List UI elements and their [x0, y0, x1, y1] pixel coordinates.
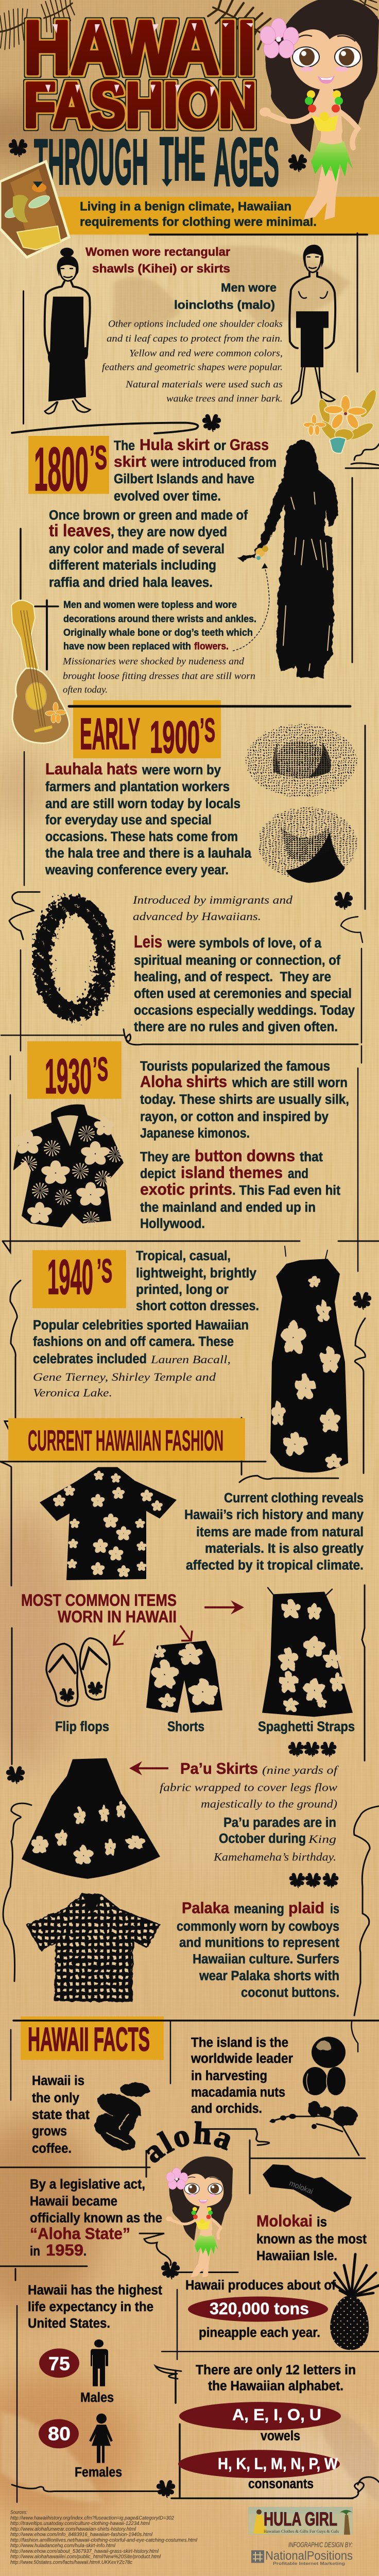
- molokai fact: [256, 2212, 367, 2263]
- stat: males: [39, 2340, 114, 2405]
- celebrities text: celebrates included: [33, 1352, 147, 1366]
- palaka text: is: [330, 1902, 339, 1916]
- aloha shirts text: [140, 1059, 349, 1141]
- macadamia fact: [191, 2036, 293, 2116]
- current hawaiian fashion heading: [8, 1418, 245, 1461]
- title clovers: [9, 139, 307, 172]
- arrow to pau skirt: [129, 1761, 168, 1775]
- palaka text: commonly worn by cowboys: [177, 1920, 339, 1934]
- current clothing text: Current clothing reveals: [224, 1491, 364, 1505]
- decorations text: Originally whale bone or dog’s teeth which: [63, 627, 253, 638]
- current clothing text: Hawaii’s rich history and many: [184, 1508, 364, 1522]
- coffee fact: Hawaii is: [32, 2074, 84, 2088]
- 1800s intro text: Grass: [230, 436, 269, 453]
- most common items heading: WORN IN HAWAII: [58, 1607, 177, 1626]
- pau parades text: October during: [219, 1832, 306, 1846]
- pre-contact script text: Other options included one shoulder cloaks: [108, 319, 283, 329]
- aloha shirts text: Aloha shirts: [140, 1073, 227, 1091]
- men heading: [174, 281, 277, 312]
- button downs text: and: [288, 1167, 308, 1181]
- credit: national positions: [251, 2540, 353, 2566]
- hawaii facts heading: [13, 2016, 164, 2060]
- celebrities text: Lauren Bacall,: [150, 1353, 231, 1366]
- credit: national positions: NationalPositions: [265, 2549, 353, 2563]
- coffee fact: [32, 2074, 90, 2156]
- 1940s heading: [32, 1249, 126, 1308]
- aloha state fact: [30, 2177, 162, 2259]
- current clothing text: affected by it tropical climate.: [186, 1558, 364, 1572]
- most common items heading: MOST COMMON ITEMS: [21, 1590, 177, 1609]
- palaka text: [177, 1900, 339, 2000]
- stat: females: 80: [48, 2423, 71, 2444]
- aloha state fact: 1959: [46, 2241, 83, 2259]
- men heading: Men wore: [221, 281, 277, 295]
- 1940s text: printed, long or: [136, 1283, 229, 1297]
- small arrows in heading: [33, 179, 173, 188]
- button downs text: the mainland and ended up in: [140, 1200, 316, 1215]
- pre-contact script text: feathers and geometric shapes were popular.: [102, 362, 283, 373]
- pau parades text: Kamehameha’s birthday.: [213, 1851, 336, 1863]
- lauhala text: and are still worn today by locals: [45, 797, 240, 811]
- sources: http://traveltips.usatoday.com/culture-clothing-hawaii-12234.html: [10, 2521, 150, 2527]
- title letter highlights: [45, 23, 253, 97]
- pau parades text: King: [308, 1833, 336, 1845]
- lauhala text: occasions. These hats come from: [45, 830, 238, 844]
- molokai fact: is: [317, 2215, 327, 2229]
- decorations text: decorations around there wrists and ankles.: [63, 614, 256, 624]
- hawaiian alphabet fact: the Hawaiian alphabet.: [208, 2379, 343, 2394]
- most common items heading: [21, 1590, 177, 1626]
- missionaries script text: Missionaries were shocked by nudeness and: [62, 656, 245, 667]
- icon: man in malo: [289, 245, 335, 403]
- palaka text: Palaka: [182, 1900, 230, 1917]
- aloha word: [147, 2121, 230, 2163]
- leis text: Leis: [134, 933, 162, 952]
- leis text: spiritual meaning or connection, of: [134, 954, 340, 968]
- icon: orchid branch: [270, 2101, 359, 2155]
- decorations text: [63, 599, 256, 652]
- pau skirts text: (nine yards of: [262, 1764, 339, 1776]
- logo: hula girl: Hawaiian Clothes & Gifts For Guys & Gals: [264, 2529, 339, 2534]
- 1800s intro text: Hula skirt: [140, 436, 210, 453]
- pineapple fact: [185, 2278, 336, 2340]
- sources: http://www.alohahawaiilei.com/public_html/New%20Site/product.html: [10, 2554, 161, 2560]
- title: THE: [160, 125, 205, 193]
- hawaii facts heading: HAWAII FACTS: [28, 2021, 150, 2058]
- aloha shirts text: rayon, or cotton and inspired by: [140, 1110, 329, 1124]
- clover divider icons: [6, 414, 371, 2498]
- clover row one: [288, 1742, 336, 1757]
- aloha shirts text: which are still worn: [232, 1076, 348, 1090]
- decorations text: Men and women were topless and wore: [63, 599, 237, 611]
- hula dancer silhouette: [237, 440, 338, 677]
- clover row two: [289, 1873, 338, 1888]
- aloha shirts text: Tourists popularized the famous: [140, 1059, 330, 1074]
- ti leaves text: raffia and dried hala leaves.: [49, 575, 213, 590]
- icon: woman in kihei: [45, 248, 90, 414]
- pau parades text: [213, 1816, 336, 1863]
- hawaiian alphabet fact: H, K, L, M, N, P, W: [218, 2454, 338, 2472]
- sources: http://www.hawaiihistory.org/index.cfm?fuseaction=ig.page&CategoryID=302: [10, 2515, 174, 2521]
- palaka text: coconut buttons.: [241, 1986, 339, 2000]
- celebrities text: Gene Tierney, Shirley Temple and: [33, 1370, 216, 1383]
- title: [24, 6, 279, 200]
- icon: modern aloha shirt: [40, 1467, 177, 1580]
- 1940s text: [136, 1249, 259, 1313]
- 1940s text: lightweight, brightly: [136, 1266, 257, 1280]
- women heading: shawls (Kihei) or skirts: [92, 262, 230, 276]
- 1800s intro text: skirt: [114, 453, 146, 470]
- hawaiian alphabet fact: A, E, I, O, U: [232, 2405, 321, 2424]
- button downs text: depict: [140, 1167, 176, 1181]
- icon: pineapple: [330, 2254, 379, 2350]
- aloha shirts text: today. These shirts are usually silk,: [140, 1093, 349, 1107]
- icon: 1940s dress: [270, 1246, 348, 1472]
- palaka text: wear Palaka shorts with: [199, 1969, 339, 1983]
- arrow to shorts: [180, 1625, 192, 1640]
- hawaiian alphabet fact: consonants: [248, 2477, 314, 2492]
- aloha state fact: in: [30, 2244, 40, 2259]
- aloha state fact: .: [83, 2244, 87, 2259]
- icon: shorts: [146, 1640, 222, 1713]
- life expectancy fact: United States.: [28, 2316, 110, 2331]
- icon: pau skirt: [22, 1758, 160, 1879]
- flower cluster top right: [303, 388, 379, 453]
- sources: http://www.alohafunwear.com/hawaiian-shirts-history.html: [10, 2527, 136, 2532]
- immigrants script text: advanced by Hawaiians.: [133, 910, 261, 923]
- 1800s intro text: [114, 436, 277, 503]
- immigrants script text: [132, 893, 293, 923]
- hawaiian alphabet fact: vowels: [261, 2429, 300, 2444]
- 1800s intro text: or: [214, 439, 226, 453]
- life expectancy fact: life expectancy in the: [28, 2300, 153, 2314]
- leis text: healing, and of respect. They are: [134, 970, 331, 985]
- arrow to dress: [204, 1600, 244, 1615]
- molokai fact: Hawaiian Isle.: [256, 2249, 337, 2263]
- pineapple fact: 320,000 tons: [210, 2299, 309, 2318]
- celebrities text: [33, 1318, 249, 1399]
- button downs text: exotic prints: [140, 1180, 232, 1198]
- pau skirts text: fabric wrapped to cover legs flow: [160, 1781, 337, 1793]
- stat: males: Males: [80, 2391, 114, 2405]
- icon: spaghetti strap dress: [262, 1588, 353, 1717]
- women heading: [85, 245, 230, 276]
- button downs text: Hollywood.: [140, 1217, 205, 1231]
- lauhala text: were worn by: [142, 763, 221, 777]
- coffee fact: state that: [32, 2108, 90, 2122]
- credit: national positions: Profitable Internet Marketing: [273, 2562, 345, 2566]
- decorations text: flowers.: [194, 640, 229, 652]
- macadamia fact: and orchids.: [191, 2102, 262, 2116]
- ti leaves text: Once brown or green and made of: [49, 509, 248, 523]
- sources: http://www.ehow.com/about_5367937_hawaii-grass-skirt-history.html: [10, 2549, 159, 2554]
- missionaries script text: [62, 656, 255, 695]
- macadamia fact: in harvesting: [191, 2069, 267, 2083]
- stat: females: Females: [75, 2465, 122, 2480]
- coffee fact: grows: [32, 2124, 67, 2139]
- 1940s heading: 1940: [47, 1249, 93, 1305]
- icon: molokai island: [263, 2164, 352, 2212]
- coffee fact: the only: [32, 2091, 80, 2105]
- aloha state fact: “Aloha State”: [30, 2224, 130, 2243]
- pre-contact script text: wauke trees and inner bark.: [166, 394, 283, 404]
- small hula girl: [166, 2157, 233, 2278]
- celebrities text: Veronica Lake.: [33, 1386, 112, 1399]
- palm fronds: [0, 0, 379, 55]
- palaka text: plaid: [288, 1900, 324, 1917]
- item labels: Flip flops: [55, 1719, 109, 1734]
- leis text: often used at ceremonies and special: [134, 987, 352, 1001]
- ti leaves text: different materials including: [49, 558, 216, 572]
- pau parades text: Pa’u parades are in: [223, 1816, 336, 1830]
- early 1900s heading: EARLY: [80, 709, 140, 759]
- ti leaves text: , they are now dyed: [111, 525, 227, 539]
- pre-contact script text: Natural materials were used such as: [125, 379, 283, 390]
- missionaries script text: often today.: [63, 685, 108, 695]
- icon: lauhala hat top: [246, 724, 357, 797]
- lauhala text: weaving conference every year.: [45, 863, 229, 877]
- lauhala text: for everyday use and special: [45, 813, 212, 827]
- ti leaves text: any color and made of several: [49, 542, 225, 556]
- item labels: Shorts: [167, 1719, 204, 1734]
- lauhala text: [45, 759, 252, 877]
- logo: hula girl: [248, 2507, 353, 2535]
- lauhala text: Lauhala hats: [45, 759, 137, 778]
- palaka text: meaning: [234, 1902, 284, 1916]
- 1800s intro text: Gilbert Islands and have: [114, 472, 254, 486]
- title: THROUGH: [34, 126, 148, 198]
- item labels: [55, 1719, 355, 1734]
- button downs text: They are: [140, 1150, 190, 1164]
- pau skirts text: [160, 1760, 339, 1810]
- 1940s text: Tropical, casual,: [136, 1249, 231, 1263]
- coffee fact: coffee.: [32, 2142, 72, 2156]
- icon: flip flops: [46, 1638, 110, 1706]
- button downs text: button downs: [195, 1147, 295, 1165]
- pre-contact script text: [102, 319, 283, 404]
- 1940s text: short cotton dresses.: [136, 1299, 259, 1313]
- women heading: Women wore rectangular: [85, 245, 230, 259]
- men heading: loincloths (malo): [174, 298, 275, 312]
- aloha state fact: By a legislative act,: [30, 2177, 145, 2192]
- logo: hula girl: HULA GIRL: [264, 2508, 337, 2530]
- pre-contact script text: Yellow and red were common colors,: [129, 348, 283, 359]
- pau skirts text: Pa’u Skirts: [180, 1760, 258, 1777]
- stat: males: 75: [48, 2353, 70, 2374]
- sources: [10, 2510, 198, 2565]
- wrist flower and dashed arrow: [233, 546, 269, 651]
- pineapple fact: pineapple each year.: [199, 2326, 320, 2340]
- missionaries script text: brought loose fitting dresses that are still worn: [63, 671, 255, 682]
- palaka text: Hawaiian culture. Surfers: [193, 1952, 339, 1967]
- aloha shirts text: Japanese kimonos.: [140, 1126, 250, 1141]
- icon: tiki board: [0, 161, 69, 257]
- aloha word: aloha: [147, 2121, 230, 2163]
- icon: palaka plaid shirt: [27, 1894, 160, 2002]
- sources: http://www.ehow.com/info_8483916_hawaiian-fashion-1940s.html: [10, 2532, 153, 2538]
- button downs text: island themes: [181, 1163, 283, 1181]
- pre-contact script text: and ti leaf capes to protect from the rain.: [107, 333, 283, 344]
- icon: macadamia nuts: [303, 2037, 346, 2095]
- 1930s heading: ’S: [93, 1050, 108, 1088]
- icon: coffee beans: [94, 2082, 149, 2155]
- macadamia fact: worldwide leader: [191, 2052, 293, 2066]
- celebrities text: Popular celebrities sported Hawaiian: [33, 1318, 249, 1332]
- 1930s heading: [27, 1041, 122, 1104]
- 1800s heading: 1800: [34, 435, 89, 504]
- item labels: Spaghetti Straps: [258, 1719, 355, 1734]
- 1940s heading: ’S: [97, 1252, 112, 1290]
- title: HAWAII: [24, 6, 255, 90]
- intro banner: [54, 197, 379, 234]
- button downs text: . This Fad even hit: [232, 1183, 340, 1198]
- life expectancy fact: [28, 2283, 162, 2331]
- button downs text: that: [300, 1150, 323, 1164]
- 1800s intro text: The: [114, 439, 135, 453]
- title: FASHION: [24, 70, 256, 141]
- stat: females: [39, 2414, 122, 2480]
- ti leaves text: ti leaves: [49, 521, 111, 540]
- leis text: there are no rules and given often.: [134, 1020, 338, 1035]
- current clothing text: items are made from natural: [196, 1525, 364, 1539]
- leis text: occasions especially weddings. Today: [134, 1003, 355, 1018]
- macadamia fact: The island is the: [191, 2036, 288, 2050]
- palaka text: and munitions to represent: [179, 1936, 339, 1950]
- pineapple fact: Hawaii produces about of: [185, 2278, 336, 2293]
- hawaiian alphabet fact: [178, 2363, 356, 2492]
- immigrants script text: Introduced by immigrants and: [132, 893, 293, 906]
- large hula girl: [260, 0, 379, 220]
- leis text: were symbols of love, of a: [167, 936, 322, 951]
- sources: Sources:: [10, 2510, 27, 2516]
- icon: ukulele: [11, 600, 70, 743]
- molokai fact: Molokai: [256, 2212, 313, 2230]
- arrow to flip flops: [114, 1631, 125, 1645]
- icon: lauhala hat bottom: [258, 807, 357, 883]
- ti leaves text: [49, 509, 248, 590]
- credit: national positions: INFOGRAPHIC DESIGN BY:: [288, 2540, 353, 2549]
- icon: aloha shirt: [12, 1105, 124, 1227]
- lauhala text: farmers and plantation workers: [45, 780, 230, 794]
- icon: lei silhouette: [42, 905, 106, 1012]
- 1800s heading: [28, 435, 109, 504]
- lauhala text: the hala tree and there is a lauhala: [45, 846, 252, 861]
- button downs text: [140, 1147, 340, 1231]
- early 1900s heading: ’S: [200, 711, 215, 749]
- sources: http://fashion.amillionlives.net/hawaii-clothing-colorful-and-eye-catching-costumes.html: [10, 2537, 198, 2543]
- sources: http://www.50states.com/facts/hawaii.htm#.UKKexYZc78c: [10, 2560, 133, 2565]
- 1800s heading: ’S: [90, 439, 107, 477]
- aloha state fact: Hawaii became: [30, 2194, 117, 2209]
- current clothing text: materials. It is also greatly: [205, 1541, 364, 1556]
- icon: molokai island: molokai: [288, 2179, 314, 2196]
- sources: http://www.huladancehq.com/hula-skirt-info.html: [10, 2543, 116, 2549]
- early 1900s heading: 1900: [150, 711, 200, 762]
- macadamia fact: macadamia nuts: [191, 2086, 285, 2100]
- molokai fact: known as the most: [256, 2232, 367, 2247]
- decorations text: have now been replaced with: [63, 640, 191, 652]
- intro banner: Living in a benign climate, Hawaiian: [80, 200, 291, 213]
- life expectancy fact: Hawaii has the highest: [28, 2283, 162, 2298]
- 1930s heading: 1930: [45, 1048, 92, 1104]
- pau skirts text: majestically to the ground): [201, 1798, 337, 1810]
- hawaiian alphabet fact: There are only 12 letters in: [196, 2363, 356, 2377]
- 1800s intro text: were introduced from: [150, 455, 277, 470]
- current clothing text: [184, 1491, 364, 1572]
- intro banner: requirements for clothing were minimal.: [80, 215, 317, 229]
- leis text: [134, 933, 355, 1035]
- celebrities text: fashions on and off camera. These: [33, 1335, 234, 1349]
- 1800s intro text: evolved over time.: [114, 489, 221, 503]
- aloha state fact: officially known as the: [30, 2211, 162, 2225]
